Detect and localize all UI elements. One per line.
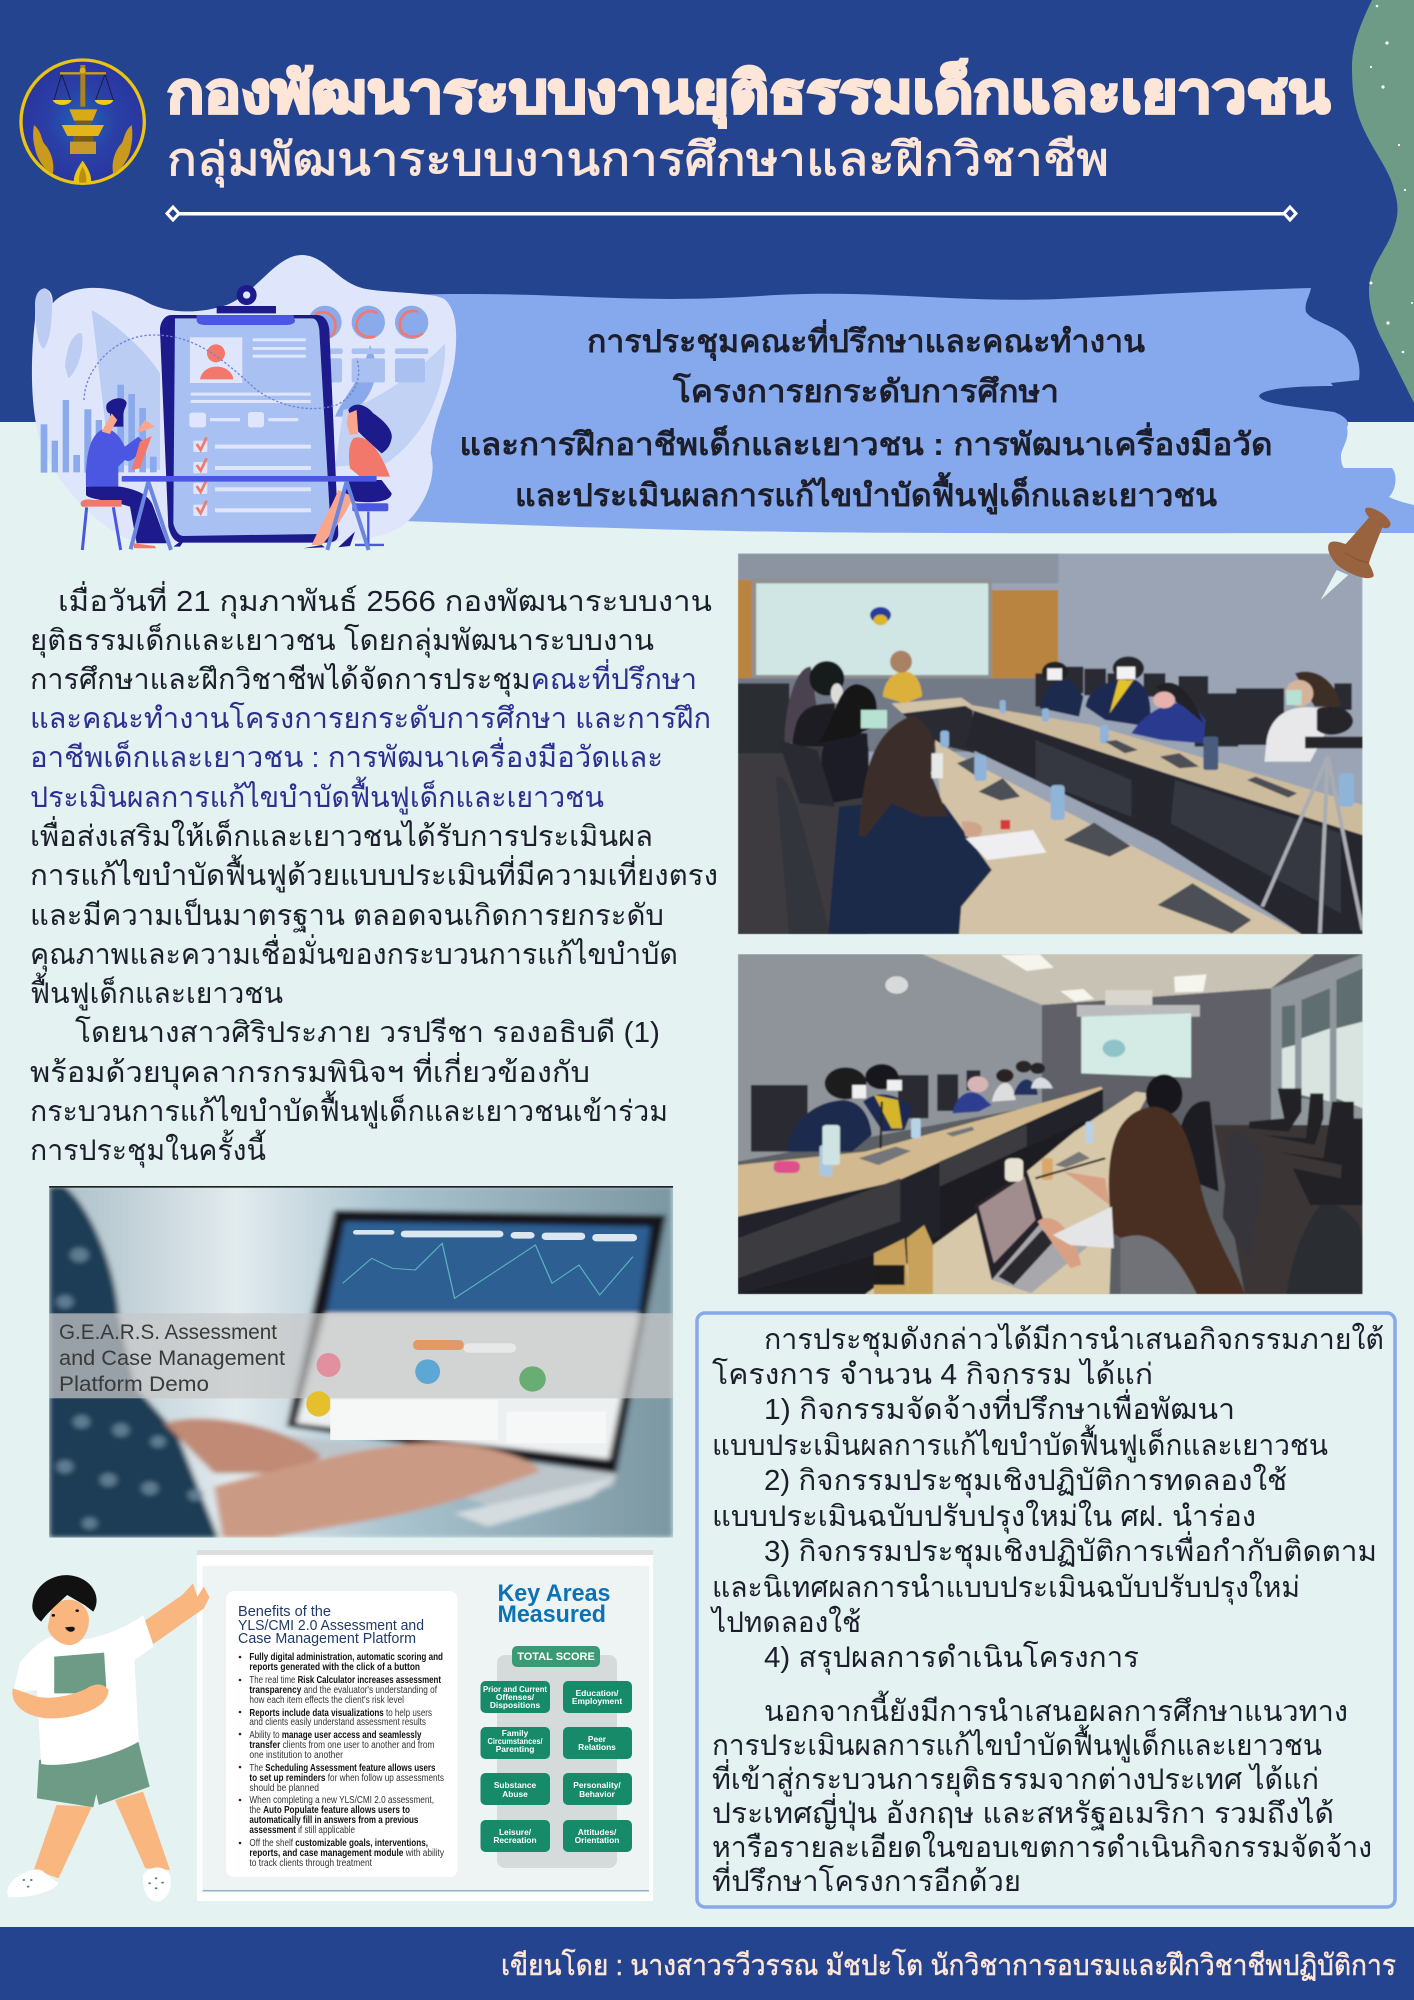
intro text: และมีความเป็นมาตรฐาน ตลอดจนเกิดการยกระดับ [30, 897, 664, 933]
intro text: การประชุมในครั้งนี้ [30, 1129, 266, 1168]
activities box: นอกจากนี้ยังมีการนำเสนอผลการศึกษาแนวทาง [764, 1690, 1348, 1728]
benefits card: When completing a new YLS/CMI 2.0 assessment, [249, 1795, 434, 1806]
key areas chart: Peer [588, 1734, 607, 1744]
pin [1321, 508, 1391, 600]
photo caption: G.E.A.R.S.: and Case Management [59, 1346, 285, 1370]
activities box [697, 1313, 1395, 1907]
benefits card: Reports include data visualizations to help users [249, 1708, 432, 1719]
key areas chart: Offenses/ [496, 1692, 535, 1702]
benefits card [226, 1591, 458, 1877]
near people [1180, 1100, 1219, 1192]
key areas chart: Behavior [579, 1789, 616, 1799]
left people [785, 667, 822, 743]
key areas chart: Education/ [576, 1688, 619, 1698]
intro text: และคณะทำงานโครงการยกระดับการศึกษา และการฝึก [30, 701, 711, 735]
far woman [883, 672, 922, 703]
intro text: การศึกษาและฝึกวิชาชีพได้จัดการประชุมคณะที่ปรึกษา [30, 659, 697, 697]
benefits card: reports generated with the click of a button [249, 1662, 420, 1673]
benefits card: Off the shelf customizable goals, interventions, [249, 1838, 428, 1849]
key areas chart: Recreation [493, 1835, 537, 1845]
benefits card: The real time Risk Calculator increases assessment [249, 1675, 442, 1686]
photo caption: G.E.A.R.S. [59, 1320, 285, 1396]
activities box: การประเมินผลการแก้ไขบำบัดฟื้นฟูเด็กและเยาวชน [712, 1724, 1322, 1763]
banner heading: และการฝึกอาชีพเด็กและเยาวชน : การพัฒนาเครื่องมือวัด [460, 422, 1272, 462]
photo: laptop platform demo [49, 1186, 673, 1538]
banner heading: การประชุมคณะที่ปรึกษาและคณะทำงาน [587, 319, 1145, 361]
activities box: 2) กิจกรรมประชุมเชิงปฏิบัติการทดลองใช้ [764, 1463, 1287, 1498]
benefits card: assessment if still applicable [249, 1825, 355, 1836]
intro text: โดยนางสาวศิริประภาย วรปรีชา รองอธิบดี (1) [75, 1015, 660, 1049]
activities box: 4) สรุปผลการดำเนินโครงการ [764, 1640, 1139, 1675]
logo: juvenile justice emblem [21, 60, 144, 183]
subtitle: กลุ่มพัฒนาระบบงานการศึกษาและฝึกวิชาชีพ [167, 133, 1109, 188]
character: boy pointing [7, 1575, 209, 1902]
benefits card: how each item effects the client's risk level [249, 1695, 404, 1706]
intro text: เมื่อวันที่ 21 กุมภาพันธ์ 2566 กองพัฒนาระบบงาน [58, 581, 712, 619]
banner heading: และประเมินผลการแก้ไขบำบัดฟื้นฟูเด็กและเยาวชน [515, 472, 1217, 515]
key areas chart [480, 1646, 632, 1868]
key areas chart: Leisure/ [499, 1827, 532, 1837]
photo: meeting room with whiteboard [738, 553, 1363, 934]
illustration: clipboard meeting [32, 255, 456, 550]
benefits card: transfer clients from one user to another and from [249, 1740, 434, 1751]
intro text: กระบวนการแก้ไขบำบัดฟื้นฟูเด็กและเยาวชนเข้าร่วม [30, 1090, 668, 1129]
activities box: ไปทดลองใช้ [710, 1605, 861, 1639]
key areas chart: Employment [572, 1696, 622, 1706]
benefits card: to track clients through treatment [249, 1858, 372, 1869]
key areas chart: Family [502, 1728, 529, 1738]
key areas chart: TOTAL SCORE [517, 1651, 595, 1663]
activities box: 3) กิจกรรมประชุมเชิงปฏิบัติการเพื่อกำกับติดตาม [764, 1531, 1377, 1569]
benefits card: should be planned [249, 1783, 319, 1794]
footer band [0, 1927, 1414, 2000]
activities box: ที่ปรึกษาโครงการอีกด้วย [712, 1861, 1021, 1898]
benefits card: Case Management Platform [238, 1630, 416, 1647]
key areas chart: Abuse [502, 1789, 528, 1799]
right chairs and dark floor [1214, 1125, 1363, 1294]
intro text: ฟื้นฟูเด็กและเยาวชน [30, 972, 283, 1011]
activities box: ที่เข้าสู่กระบวนการยุติธรรมจากต่างประเทศ ได้แก่ [712, 1759, 1319, 1797]
banner shape [400, 288, 1414, 533]
intro text: ประเมินผลการแก้ไขบำบัดฟื้นฟูเด็กและเยาวชน [30, 776, 604, 815]
key areas heading: Measured [498, 1601, 606, 1628]
bottles and mics [940, 700, 1354, 820]
benefits card: YLS/CMI 2.0 Assessment and [238, 1617, 424, 1634]
activities box: แบบประเมินผลการแก้ไขบำบัดฟื้นฟูเด็กและเยาวชน [712, 1424, 1328, 1463]
intro text: การแก้ไขบำบัดฟื้นฟูด้วยแบบประเมินที่มีความเที่ยงตรง [30, 854, 718, 893]
divider with diamonds [167, 207, 1296, 220]
benefits card: The Scheduling Assessment feature allows users [249, 1763, 436, 1774]
key areas chart: Relations [578, 1742, 616, 1752]
benefits card: Fully digital administration, automatic scoring and [249, 1652, 443, 1663]
key areas chart: Circumstances/ [488, 1736, 543, 1746]
intro text: พร้อมด้วยบุคลากรกรมพินิจฯ ที่เกี่ยวข้องกับ [30, 1052, 590, 1090]
key areas chart: Attitudes/ [578, 1827, 617, 1837]
benefits card: the Auto Populate feature allows users to [249, 1805, 410, 1816]
photo caption: G.E.A.R.S.: G.E.A.R.S. Assessment [59, 1320, 277, 1344]
benefits card: reports, and case management module with ability [249, 1848, 444, 1859]
photo caption: G.E.A.R.S.: Platform Demo [59, 1372, 209, 1396]
table [122, 476, 377, 482]
laptop [974, 1170, 1044, 1280]
key areas heading: Key Areas [498, 1580, 610, 1607]
title: กองพัฒนาระบบงานยุติธรรมเด็กและเยาวชน [167, 58, 1330, 128]
header band [0, 0, 1414, 422]
near table [865, 1092, 1149, 1294]
activities box: และนิเทศผลการนำแบบประเมินฉบับปรับปรุงใหม่ [712, 1570, 1300, 1605]
benefits card: to set up reminders for when follow up assessments [249, 1773, 444, 1784]
intro text [30, 581, 718, 1168]
benefits card: Benefits of the [238, 1603, 331, 1620]
activities box: หารือรายละเอียดในขอบเขตการดำเนินกิจกรรมจัดจ้าง [712, 1830, 1372, 1864]
intro text: เพื่อส่งเสริมให้เด็กและเยาวชนได้รับการประเมินผล [30, 816, 653, 853]
key areas chart: Substance [494, 1780, 537, 1790]
key areas chart: Personality/ [573, 1780, 621, 1790]
activities box: ประเทศญี่ปุ่น อังกฤษ และสหรัฐอเมริกา รวมถึงได้ [712, 1793, 1334, 1831]
man [86, 429, 143, 488]
benefits card: Ability to manage user access and seamlessly [249, 1730, 422, 1741]
benefits card: automatically fill in answers from a previous [249, 1815, 419, 1826]
benefits card: transparency and the evaluator's understanding of [249, 1685, 437, 1696]
key areas chart: Prior and Current [483, 1684, 547, 1694]
chairs left [751, 1070, 980, 1152]
slide: benefits and key areas [197, 1550, 653, 1901]
activities box: 1) กิจกรรมจัดจ้างที่ปรึกษาเพื่อพัฒนา [764, 1389, 1235, 1426]
intro text: อาชีพเด็กและเยาวชน : การพัฒนาเครื่องมือวัดและ [30, 737, 663, 774]
key areas heading [498, 1580, 610, 1628]
green wavy decoration [1352, 0, 1414, 403]
activities box: โครงการ จำนวน 4 กิจกรรม ได้แก่ [712, 1357, 1153, 1391]
intro text: คุณภาพและความเชื่อมั่นของกระบวนการแก้ไขบำบัด [30, 934, 678, 972]
woman [348, 405, 392, 453]
activities box: การประชุมดังกล่าวได้มีการนำเสนอกิจกรรมภายใต้ [764, 1322, 1384, 1357]
foreground woman [828, 800, 992, 934]
key areas chart: Parenting [496, 1744, 534, 1754]
intro text: ยุติธรรมเด็กและเยาวชน โดยกลุ่มพัฒนาระบบงาน [30, 622, 654, 658]
key areas chart: Dispositions [490, 1700, 540, 1710]
key areas chart: Orientation [575, 1835, 619, 1845]
people right [1040, 679, 1083, 717]
benefits card: one institution to another [249, 1750, 344, 1761]
benefits card: and clients easily understand assessment results [249, 1717, 426, 1728]
banner heading [460, 319, 1272, 515]
activities box: แบบประเมินฉบับปรับปรุงใหม่ใน ศฝ. นำร่อง [712, 1499, 1256, 1534]
photo: room with projector screen [738, 954, 1363, 1294]
banner heading: โครงการยกระดับการศึกษา [672, 372, 1059, 409]
